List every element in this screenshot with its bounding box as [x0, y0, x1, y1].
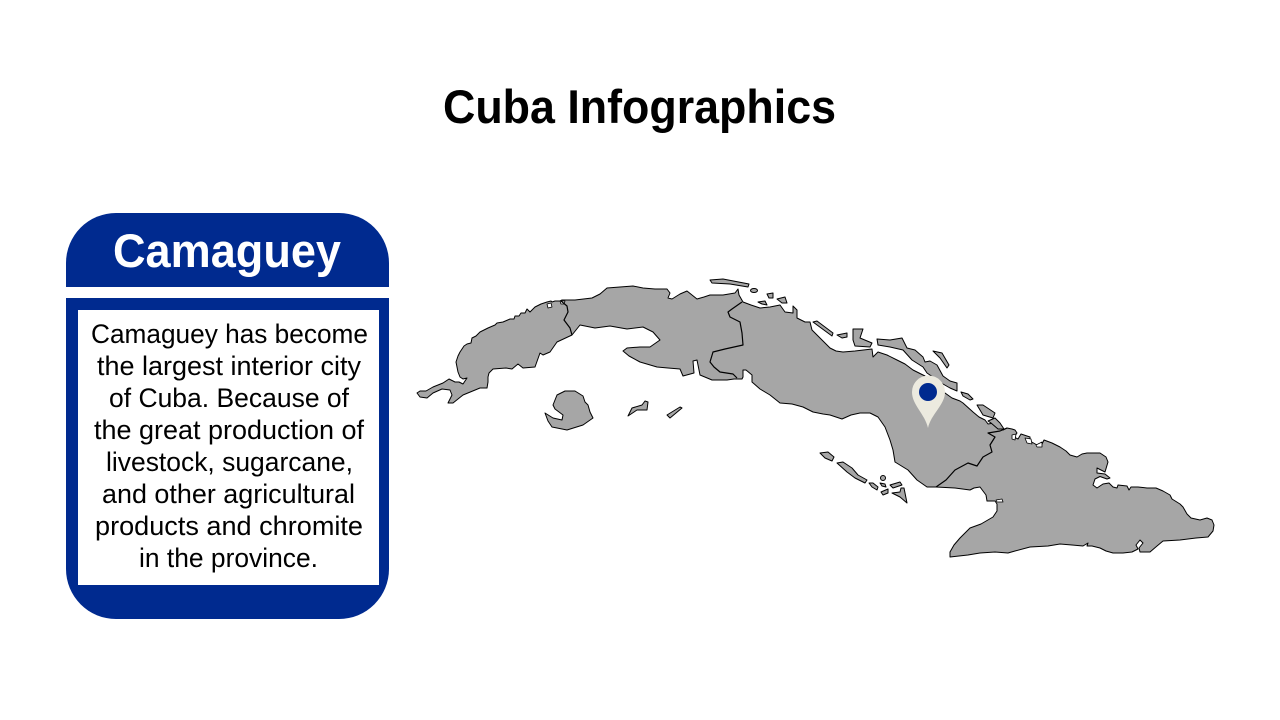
province borders [561, 301, 1007, 487]
panel body text: Camaguey has become [91, 319, 368, 349]
panel body text: in the province. [139, 543, 318, 573]
map of Cuba [417, 279, 1214, 557]
main island [417, 286, 1214, 557]
northern cays [710, 279, 1004, 429]
Isla de la Juventud [545, 391, 593, 430]
panel header [66, 213, 389, 287]
southern islets [628, 401, 907, 503]
panel body text: the largest interior city [97, 351, 362, 381]
panel body text: and other agricultural [102, 479, 355, 509]
panel body text: livestock, sugarcane, [106, 447, 353, 477]
panel body frame [66, 298, 389, 619]
panel: Camaguey [66, 213, 389, 619]
panel body text [78, 310, 379, 585]
panel body text: of Cuba. Because of [109, 383, 350, 413]
panel header: Camaguey [113, 224, 341, 277]
panel body text: the great production of [94, 415, 365, 445]
coastal inlets [547, 301, 1042, 502]
title: Cuba Infographics [443, 80, 836, 133]
panel body text: products and chromite [95, 511, 363, 541]
icon: location pin [912, 376, 945, 428]
